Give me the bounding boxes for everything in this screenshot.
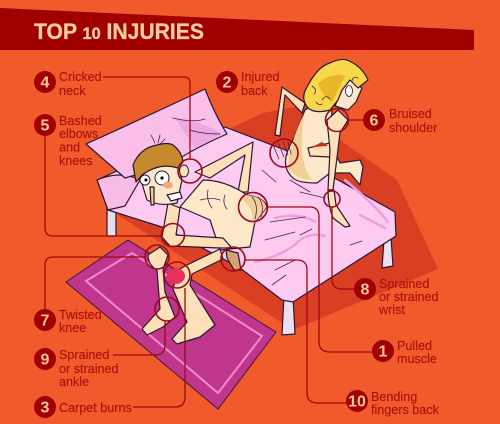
- man figure: [133, 135, 267, 344]
- label 9: sprained or strained ankle: [34, 348, 119, 389]
- label 4: cricked neck: 4: [41, 74, 50, 92]
- label 4: cricked neck: neck: [59, 84, 86, 98]
- label 8: sprained or strained wrist: wrist: [378, 303, 405, 317]
- pillow: [86, 89, 227, 210]
- label 9: sprained or strained ankle: ankle: [59, 375, 89, 389]
- label 3: carpet burns: 3: [41, 400, 50, 416]
- label 6: bruised shoulder: shoulder: [389, 121, 437, 135]
- label 6: bruised shoulder: Bruised: [389, 107, 432, 121]
- label 5: bashed elbows and knees: [34, 114, 102, 168]
- bed: [97, 127, 396, 335]
- label 3: carpet burns: Carpet burns: [59, 401, 132, 415]
- label 10: bending fingers back: fingers back: [371, 403, 440, 417]
- title banner: TOP 10 INJURIES: [34, 19, 204, 44]
- label 10: bending fingers back: Bending: [371, 390, 417, 404]
- label 1: pulled muscle: Pulled: [397, 339, 432, 353]
- label 7: twisted knee: Twisted: [59, 308, 102, 322]
- label 9: sprained or strained ankle: 9: [41, 352, 50, 368]
- label 4: cricked neck: Cricked: [59, 70, 102, 84]
- label 2: injured back: Injured: [241, 70, 280, 84]
- label 8: sprained or strained wrist: or strained: [379, 290, 439, 304]
- label 10: bending fingers back: [346, 390, 440, 417]
- label 6: bruised shoulder: [363, 107, 437, 135]
- label 9: sprained or strained ankle: or strained: [59, 362, 119, 376]
- label 7: twisted knee: [34, 308, 102, 335]
- label 1: pulled muscle: [372, 339, 437, 366]
- label 5: bashed elbows and knees: Bashed: [59, 114, 102, 128]
- label 5: bashed elbows and knees: knees: [59, 154, 93, 168]
- bed shadow: [118, 105, 438, 330]
- label 1: pulled muscle: 1: [379, 344, 388, 360]
- leader lines: [45, 77, 378, 407]
- label 5: bashed elbows and knees: and: [59, 140, 80, 154]
- label 6: bruised shoulder: 6: [370, 112, 379, 130]
- label 5: bashed elbows and knees: elbows: [59, 127, 98, 141]
- label 1: pulled muscle: muscle: [397, 352, 437, 366]
- carpet: [66, 240, 276, 409]
- label 8: sprained or strained wrist: 8: [361, 282, 370, 298]
- label 2: injured back: 2: [223, 74, 232, 92]
- label 8: sprained or strained wrist: [354, 277, 439, 317]
- label 7: twisted knee: 7: [41, 312, 50, 330]
- injury circles: [145, 108, 348, 321]
- label 2: injured back: back: [241, 84, 268, 98]
- label 5: bashed elbows and knees: 5: [41, 118, 50, 134]
- label 3: carpet burns: [34, 396, 132, 418]
- label 10: bending fingers back: 10: [348, 394, 366, 410]
- label 8: sprained or strained wrist: Sprained: [379, 277, 429, 291]
- label 7: twisted knee: knee: [59, 321, 86, 335]
- woman figure: [273, 59, 368, 227]
- label 4: cricked neck: [34, 70, 102, 98]
- label 9: sprained or strained ankle: Sprained: [59, 348, 109, 362]
- label 2: injured back: [216, 70, 280, 98]
- title banner: [0, 8, 474, 50]
